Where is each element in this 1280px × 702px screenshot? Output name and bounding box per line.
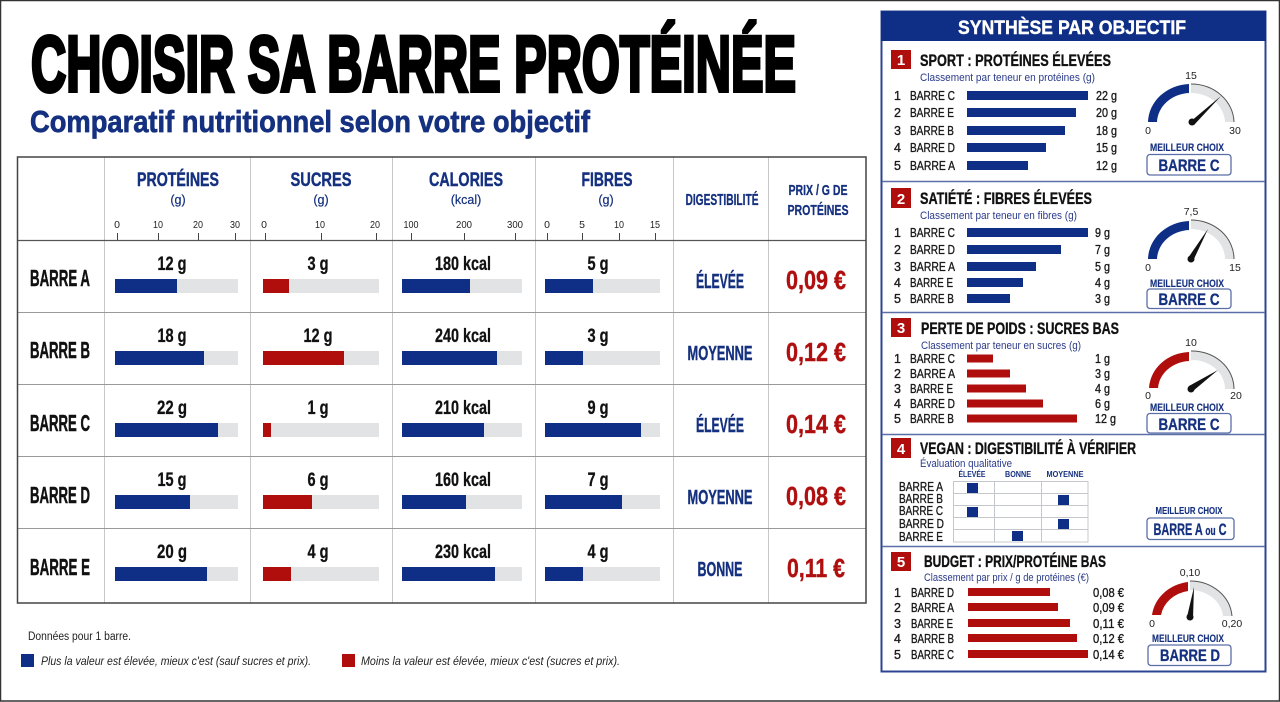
qualitative matrix: BONNE xyxy=(1005,470,1032,479)
column header: fibres: 5 xyxy=(579,219,585,231)
column header: prix par gramme xyxy=(788,182,848,219)
row: barre D xyxy=(30,470,846,511)
ranking chart: prix: BARRE D xyxy=(911,586,954,600)
row: barre C: BARRE C xyxy=(30,410,90,436)
ranking chart: sucres: 2 xyxy=(894,367,901,381)
section 1: sport: 1 xyxy=(897,52,905,69)
section 1: sport: SPORT : PROTÉINES ÉLEVÉES xyxy=(920,51,1111,70)
panel: synthèse par objectif xyxy=(881,11,1266,672)
gauge: prix: 0 xyxy=(1149,618,1155,630)
column header: prix par gramme: PRIX / G DE xyxy=(788,182,848,199)
row: barre A: ÉLEVÉE xyxy=(696,270,744,293)
column header: sucres: (g) xyxy=(313,193,329,207)
ranking chart: sucres: BARRE B xyxy=(910,412,954,426)
column header: protéines: PROTÉINES xyxy=(137,169,219,191)
qualitative matrix: ÉLEVÉE xyxy=(958,470,986,479)
best choice: vegan: BARRE A ou C xyxy=(1154,520,1226,539)
column header: fibres: 10 xyxy=(614,219,624,231)
gauge: prix xyxy=(1149,567,1242,630)
ranking chart: sucres: 5 xyxy=(894,412,901,426)
row: barre D: 15 g xyxy=(158,470,186,491)
ranking chart: fibres: 4 xyxy=(894,276,901,290)
ranking chart: protéines: BARRE D xyxy=(910,141,955,155)
section 5: budget: 5 xyxy=(897,554,905,571)
row: barre B: MOYENNE xyxy=(688,343,752,365)
ranking chart: prix: 0,11 € xyxy=(1093,617,1124,631)
ranking chart: sucres: BARRE E xyxy=(910,382,953,396)
qualitative matrix: BARRE C xyxy=(899,504,943,518)
section 4: vegan: 4 xyxy=(897,441,906,458)
panel header xyxy=(881,11,1266,41)
best choice: budget xyxy=(1148,633,1231,666)
column header: sucres xyxy=(261,170,380,240)
row: barre E xyxy=(30,542,845,583)
section 5: budget xyxy=(891,552,1242,666)
column header: calories xyxy=(404,170,523,240)
ranking chart: protéines: 4 xyxy=(894,141,901,155)
row: barre D: 0,08 € xyxy=(786,481,846,511)
section 3: perte de poids: PERTE DE POIDS : SUCRES BAS xyxy=(921,320,1119,338)
ranking chart: sucres: 12 g xyxy=(1095,412,1116,426)
ranking chart: fibres: 5 xyxy=(894,292,901,306)
ranking chart: prix xyxy=(894,586,1124,662)
section 1: sport: Classement par teneur en protéines (g) xyxy=(920,72,1095,84)
column header: sucres: 10 xyxy=(315,219,325,231)
column header: fibres xyxy=(544,170,660,240)
best choice: vegan xyxy=(1147,505,1234,540)
column header: protéines xyxy=(114,169,240,240)
ranking chart: fibres: BARRE D xyxy=(910,243,955,257)
row: barre C: 22 g xyxy=(157,398,187,419)
ranking chart: sucres: 4 g xyxy=(1095,382,1110,396)
row: barre D: 160 kcal xyxy=(435,470,491,491)
ranking chart: protéines: BARRE A xyxy=(910,159,956,173)
row: barre B: 12 g xyxy=(304,326,332,347)
gauge: sucres: 10 xyxy=(1185,337,1197,349)
best choice: satiété xyxy=(1147,278,1231,309)
column header: fibres: FIBRES xyxy=(582,170,632,191)
ranking chart: fibres: BARRE C xyxy=(910,226,955,240)
ranking chart: protéines: 22 g xyxy=(1096,89,1117,103)
ranking chart: fibres: 3 xyxy=(894,260,901,274)
row: barre B xyxy=(30,326,846,367)
ranking chart: fibres xyxy=(894,226,1110,306)
ranking chart: protéines: 5 xyxy=(894,159,901,173)
ranking chart: sucres: 1 g xyxy=(1095,352,1110,366)
column header: protéines: 10 xyxy=(153,219,163,231)
column header: protéines: 0 xyxy=(114,219,120,231)
qualitative matrix: BARRE B xyxy=(899,492,943,506)
section 5: budget: BUDGET : PRIX/PROTÉINE BAS xyxy=(924,552,1106,571)
section 2: satiété: 2 xyxy=(897,191,905,208)
ranking chart: fibres: 2 xyxy=(894,243,901,257)
column header: protéines: (g) xyxy=(170,193,186,207)
ranking chart: sucres: BARRE A xyxy=(910,367,956,381)
ranking chart: protéines: 18 g xyxy=(1096,124,1117,138)
qualitative matrix: BARRE A xyxy=(899,480,944,494)
ranking chart: prix: 0,12 € xyxy=(1093,632,1124,646)
row: barre E: 0,11 € xyxy=(787,553,845,583)
ranking chart: protéines: BARRE C xyxy=(910,89,955,103)
best choice: budget: BARRE D xyxy=(1160,646,1220,665)
ranking chart: fibres: 5 g xyxy=(1095,260,1110,274)
ranking chart: prix: BARRE B xyxy=(911,632,954,646)
row: barre B: 3 g xyxy=(588,326,608,347)
title: CHOISIR SA BARRE PROTÉINÉE xyxy=(31,19,796,108)
ranking chart: protéines: BARRE E xyxy=(910,106,954,120)
ranking chart: sucres: 4 xyxy=(894,397,901,411)
ranking chart: protéines: 1 xyxy=(894,89,901,103)
column header: calories: (kcal) xyxy=(451,193,481,207)
row: barre E: 230 kcal xyxy=(435,542,491,563)
column header: calories: 300 xyxy=(507,219,523,231)
row: barre C xyxy=(30,398,846,439)
section 2: satiété: Classement par teneur en fibres (g) xyxy=(920,210,1077,222)
ranking chart: sucres: 6 g xyxy=(1095,397,1110,411)
section 1: sport xyxy=(891,50,1241,175)
gauge: sucres: 20 xyxy=(1230,390,1242,402)
gauge: protéines: 15 xyxy=(1185,70,1197,82)
best choice: perte de poids xyxy=(1147,402,1231,434)
column header: calories: CALORIES xyxy=(429,170,503,191)
section 3: perte de poids: Classement par teneur en sucres (g) xyxy=(921,340,1081,352)
footnote: Données pour 1 barre. xyxy=(28,631,131,643)
ranking chart: fibres: 1 xyxy=(894,226,901,240)
row: barre E: 4 g xyxy=(308,542,328,563)
column header: sucres: SUCRES xyxy=(290,170,352,191)
best choice: vegan: MEILLEUR CHOIX xyxy=(1156,505,1222,517)
ranking chart: protéines: 3 xyxy=(894,124,901,138)
ranking chart: protéines: 15 g xyxy=(1096,141,1117,155)
ranking chart: fibres: 9 g xyxy=(1095,226,1110,240)
ranking chart: protéines: 2 xyxy=(894,106,901,120)
row: barre A: 3 g xyxy=(308,254,328,275)
column header: calories: 100 xyxy=(404,219,419,231)
gauge: sucres: 0 xyxy=(1145,390,1151,402)
row: barre D: 6 g xyxy=(308,470,328,491)
gauge: protéines: 0 xyxy=(1145,125,1151,137)
ranking chart: protéines: BARRE B xyxy=(910,124,954,138)
ranking chart: prix: 5 xyxy=(894,648,901,662)
best choice: sport: BARRE C xyxy=(1158,156,1220,175)
row: barre B: 0,12 € xyxy=(786,337,846,367)
legend: red: Moins la valeur est élevée, mieux c'est (sucres et prix). xyxy=(361,656,620,668)
column header: sucres: 20 xyxy=(370,219,380,231)
ranking chart: sucres: 3 g xyxy=(1095,367,1110,381)
row: barre A xyxy=(30,254,846,295)
row: barre A: 180 kcal xyxy=(435,254,491,275)
best choice: sport: MEILLEUR CHOIX xyxy=(1150,142,1225,154)
ranking chart: fibres: BARRE A xyxy=(910,260,956,274)
comparison table xyxy=(17,157,866,603)
ranking chart: protéines: 20 g xyxy=(1096,106,1117,120)
qualitative matrix: MOYENNE xyxy=(1046,470,1084,479)
qualitative matrix: BARRE D xyxy=(899,517,944,531)
column header: prix par gramme: PROTÉINES xyxy=(788,202,848,219)
gauge: prix: 0,10 xyxy=(1180,567,1200,579)
gauge: fibres xyxy=(1145,206,1241,274)
best choice: budget: MEILLEUR CHOIX xyxy=(1152,633,1224,645)
row: barre C: 0,14 € xyxy=(786,409,846,439)
row: barre B: 240 kcal xyxy=(435,326,491,347)
ranking chart: protéines xyxy=(894,89,1117,173)
ranking chart: fibres: 7 g xyxy=(1095,243,1110,257)
row: barre A: 0,09 € xyxy=(786,265,846,295)
gauge: fibres: 0 xyxy=(1145,262,1151,274)
column header: protéines: 30 xyxy=(230,219,240,231)
ranking chart: prix: 0,09 € xyxy=(1093,601,1124,615)
row: barre C: 9 g xyxy=(588,398,608,419)
section 2: satiété xyxy=(891,188,1241,309)
ranking chart: prix: 4 xyxy=(894,632,901,646)
gauge: sucres xyxy=(1145,337,1242,402)
best choice: perte de poids: MEILLEUR CHOIX xyxy=(1150,402,1225,414)
ranking chart: prix: 3 xyxy=(894,617,901,631)
ranking chart: sucres: BARRE C xyxy=(910,352,955,366)
column header: fibres: (g) xyxy=(598,193,614,207)
row: barre C: 210 kcal xyxy=(435,398,491,419)
section 3: perte de poids: 3 xyxy=(897,320,905,337)
row: barre D: BARRE D xyxy=(30,482,90,508)
column header: fibres: 0 xyxy=(544,219,550,231)
column header: calories: 200 xyxy=(456,219,472,231)
column header: sucres: 0 xyxy=(261,219,267,231)
ranking chart: prix: 0,08 € xyxy=(1093,586,1124,600)
gauge: protéines: 30 xyxy=(1229,125,1241,137)
row: barre B: 18 g xyxy=(158,326,186,347)
section 3: perte de poids xyxy=(891,318,1242,434)
ranking chart: sucres: 3 xyxy=(894,382,901,396)
row: barre D: 7 g xyxy=(588,470,608,491)
ranking chart: fibres: 3 g xyxy=(1095,292,1110,306)
ranking chart: prix: BARRE A xyxy=(911,601,955,615)
row: barre B: BARRE B xyxy=(30,337,90,363)
ranking chart: prix: BARRE C xyxy=(911,648,954,662)
best choice: sport xyxy=(1147,142,1231,175)
row: barre D: MOYENNE xyxy=(688,487,752,509)
row: barre E: 4 g xyxy=(588,542,608,563)
row: barre A: 5 g xyxy=(588,254,608,275)
ranking chart: prix: 0,14 € xyxy=(1093,648,1124,662)
row: barre C: 1 g xyxy=(308,398,328,419)
section 4: vegan: VEGAN : DIGESTIBILITÉ À VÉRIFIER xyxy=(920,439,1136,458)
gauge: protéines xyxy=(1145,70,1241,137)
ranking chart: prix: 1 xyxy=(894,586,901,600)
row: barre A: 12 g xyxy=(158,254,186,275)
section 4: vegan: Évaluation qualitative xyxy=(920,457,1012,470)
best choice: satiété: BARRE C xyxy=(1158,290,1220,309)
column header: fibres: 15 xyxy=(650,219,660,231)
ranking chart: fibres: 4 g xyxy=(1095,276,1110,290)
qualitative matrix xyxy=(899,470,1088,544)
row: barre C: ÉLEVÉE xyxy=(696,414,744,437)
best choice: satiété: MEILLEUR CHOIX xyxy=(1150,278,1225,290)
ranking chart: fibres: BARRE B xyxy=(910,292,954,306)
gauge: fibres: 15 xyxy=(1229,262,1241,274)
section 5: budget: Classement par prix / g de protéines (€) xyxy=(924,572,1089,584)
row: barre A: BARRE A xyxy=(30,265,90,291)
section 4: vegan xyxy=(891,438,1234,544)
ranking chart: prix: BARRE E xyxy=(911,617,953,631)
qualitative matrix: BARRE E xyxy=(899,530,943,544)
gauge: fibres: 7,5 xyxy=(1184,206,1198,218)
best choice: perte de poids: BARRE C xyxy=(1158,415,1220,434)
ranking chart: prix: 2 xyxy=(894,601,901,615)
ranking chart: sucres xyxy=(894,352,1116,426)
ranking chart: fibres: BARRE E xyxy=(910,276,953,290)
ranking chart: sucres: BARRE D xyxy=(910,397,955,411)
gauge: prix: 0,20 xyxy=(1222,618,1242,630)
ranking chart: sucres: 1 xyxy=(894,352,901,366)
column header: digestibilité: DIGESTIBILITÉ xyxy=(686,192,758,209)
panel header: SYNTHÈSE PAR OBJECTIF xyxy=(958,17,1186,39)
row: barre E: 20 g xyxy=(157,542,187,563)
ranking chart: protéines: 12 g xyxy=(1096,159,1117,173)
section 2: satiété: SATIÉTÉ : FIBRES ÉLEVÉES xyxy=(920,189,1092,208)
subtitle: Comparatif nutritionnel selon votre objectif xyxy=(30,104,591,139)
row: barre E: BARRE E xyxy=(30,554,90,580)
legend: blue: Plus la valeur est élevée, mieux c'est (sauf sucres et prix). xyxy=(41,656,311,668)
row: barre E: BONNE xyxy=(698,559,742,581)
column header: protéines: 20 xyxy=(193,219,203,231)
